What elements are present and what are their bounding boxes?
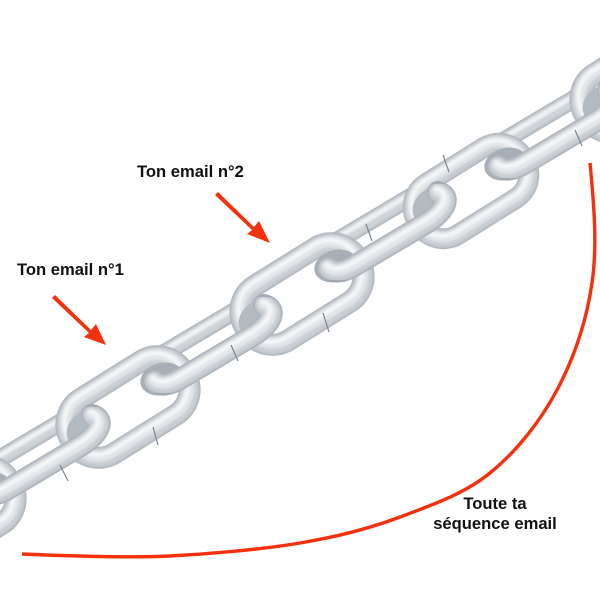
label: email 1: Ton email n°1 [17, 260, 124, 279]
label: email 2: Ton email n°2 [137, 162, 244, 181]
front bars of side links [0, 77, 600, 510]
arrow: to email 1 [52, 295, 106, 345]
link seams [60, 130, 582, 481]
back bars of side links [0, 91, 584, 468]
label: whole sequence: séquence email [433, 514, 557, 533]
label: whole sequence: Toute ta [463, 494, 527, 513]
curve: sequence bracket [22, 163, 595, 557]
arrow: to email 2 [215, 192, 270, 243]
